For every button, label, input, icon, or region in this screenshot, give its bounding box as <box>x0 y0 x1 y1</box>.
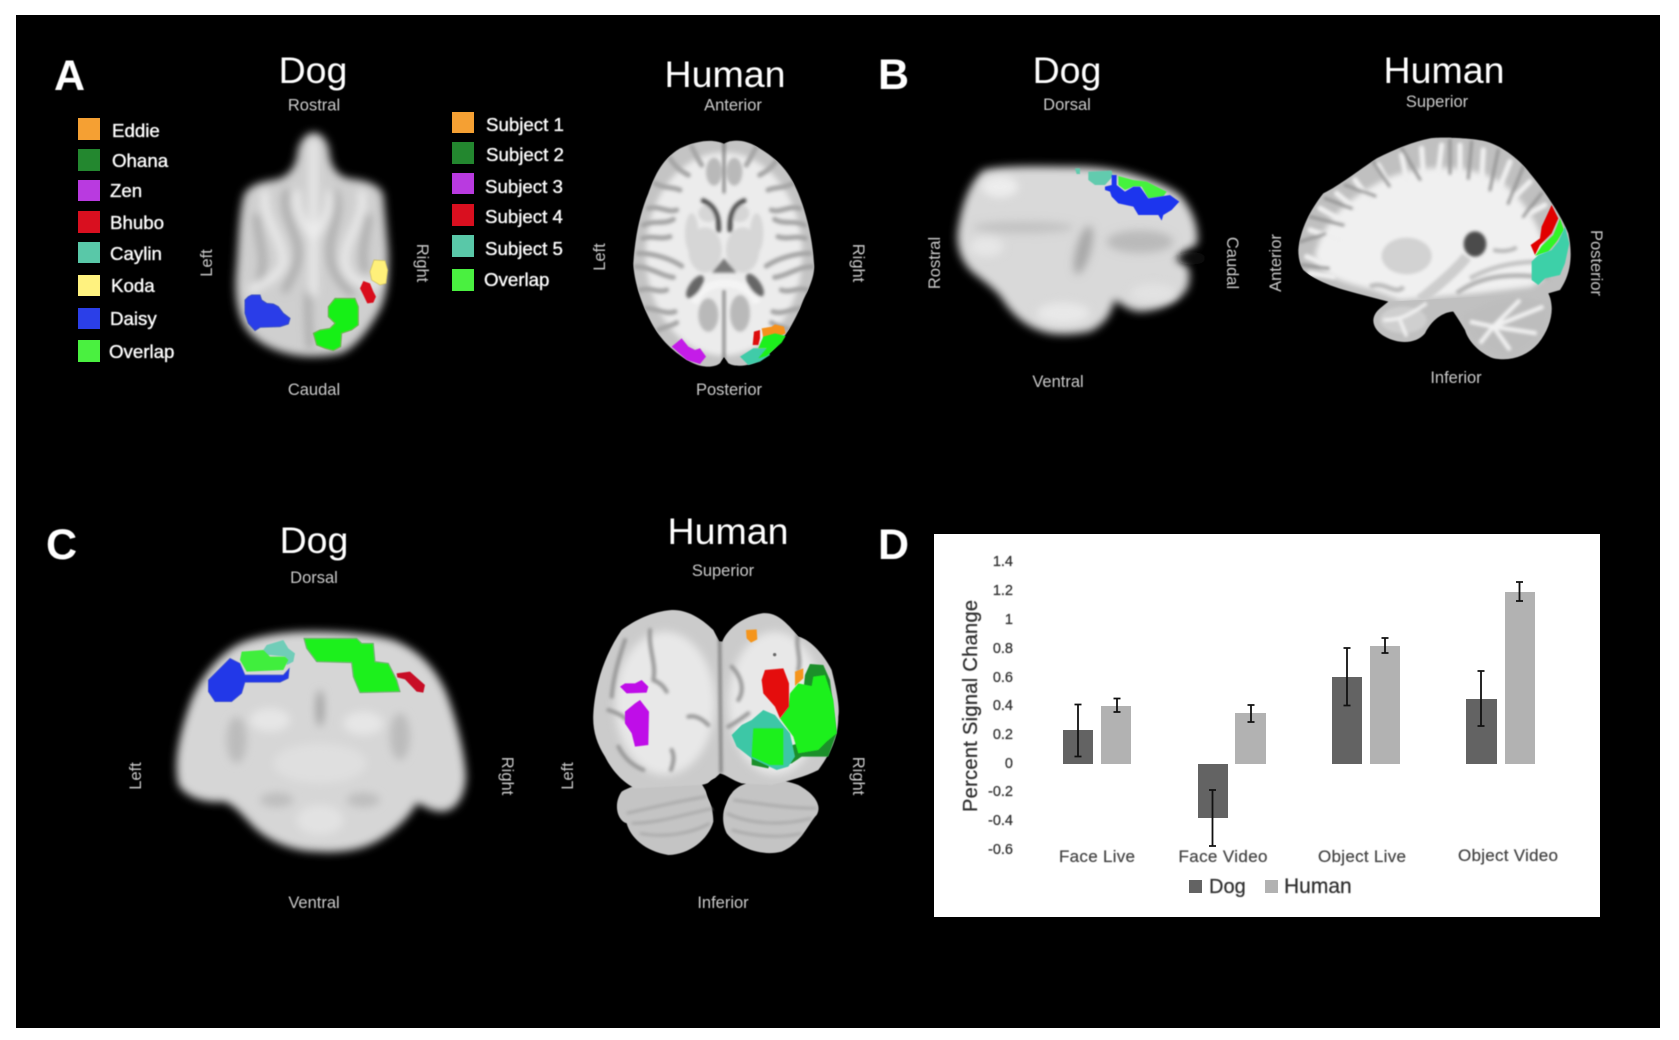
brain: human coronal <box>593 610 839 855</box>
orientation labels: Rostral <box>926 237 944 289</box>
y axis ticks: 1.2 <box>993 583 1013 599</box>
legend: dogs: Daisy <box>110 308 157 329</box>
heading: Dog: Dog <box>279 49 347 91</box>
panel B <box>878 49 1605 391</box>
heading: Human: Human <box>668 510 788 552</box>
orientation labels: Left <box>591 243 609 271</box>
brain: dog coronal <box>176 632 466 852</box>
legend: dogs: Caylin <box>110 243 162 264</box>
legend: human subjects: Subject 2 <box>486 144 564 165</box>
region: Daisy <box>208 658 289 702</box>
region: overlap right <box>304 638 400 693</box>
y axis ticks <box>988 554 1013 858</box>
orientation labels <box>198 96 867 399</box>
region: subject 1 <box>746 629 803 686</box>
region: subject 4 <box>1531 205 1558 255</box>
y axis ticks: 1 <box>1005 612 1013 628</box>
chart legend <box>1189 875 1352 898</box>
legend: dogs: Eddie <box>112 120 160 141</box>
orientation labels: Posterior <box>1587 230 1605 297</box>
orientation labels: Superior <box>692 562 755 580</box>
orientation labels: Left <box>559 762 577 790</box>
brain: dog axial <box>236 133 388 357</box>
panel A <box>54 49 867 399</box>
orientation labels: Caudal <box>288 381 340 399</box>
panel letter A: A <box>54 52 85 100</box>
legend: human subjects <box>452 112 564 291</box>
region: overlap <box>1535 218 1564 256</box>
bars: Face Video <box>1198 713 1266 818</box>
legend: human subjects: Subject 3 <box>485 176 563 197</box>
orientation labels: Dorsal <box>290 569 338 587</box>
orientation labels: Rostral <box>288 96 340 114</box>
chart background <box>934 534 1600 917</box>
legend: human subjects: Subject 5 <box>485 238 563 259</box>
orientation labels: Ventral <box>1032 373 1084 391</box>
y axis ticks: -0.2 <box>988 784 1013 800</box>
region: overlap left <box>240 650 288 672</box>
bar chart <box>1063 582 1535 846</box>
legend: dogs: Bhubo <box>110 212 164 233</box>
orientation labels: Anterior <box>1267 234 1285 292</box>
x axis labels <box>1059 846 1558 866</box>
y axis ticks: 1.4 <box>993 554 1013 570</box>
orientation labels: Dorsal <box>1043 96 1091 114</box>
region: Daisy <box>245 295 290 331</box>
region: Caylin <box>263 640 295 665</box>
chart legend: Human <box>1284 875 1352 898</box>
region: subject 4 <box>762 668 789 718</box>
error bars <box>1074 582 1523 846</box>
legend: dogs: Ohana <box>112 150 169 171</box>
orientation labels: Inferior <box>1430 369 1482 387</box>
heading: Dog: Dog <box>1033 49 1101 91</box>
y axis ticks: 0 <box>1005 756 1013 772</box>
heading: Human: Human <box>665 53 785 95</box>
panel letter B: B <box>878 51 909 99</box>
y axis ticks: 0.4 <box>993 698 1013 714</box>
orientation labels: Right <box>498 757 516 796</box>
region: Daisy <box>1105 175 1179 221</box>
chart legend: Dog <box>1209 876 1246 898</box>
orientation labels: Right <box>413 244 431 283</box>
region: Koda <box>370 260 388 285</box>
legend: human subjects: Subject 1 <box>486 114 564 135</box>
region: subject 2 <box>752 664 837 768</box>
orientation labels: Superior <box>1406 93 1469 111</box>
legend: dogs: Zen <box>110 180 142 201</box>
y axis ticks: 0.2 <box>993 727 1013 743</box>
legend: human subjects: Subject 4 <box>485 206 563 227</box>
region: overlap <box>313 298 358 351</box>
region: subject 5 <box>740 348 770 365</box>
region: subject 5 <box>732 710 795 770</box>
brain: human sagittal <box>1298 138 1571 359</box>
orientation labels: Left <box>127 762 145 790</box>
heading: Human: Human <box>1384 49 1504 91</box>
region: Caylin <box>1075 168 1113 185</box>
region: Bhubo <box>397 672 425 693</box>
panel letter D: D <box>878 521 909 569</box>
panel C <box>46 510 867 912</box>
bars: Face Live <box>1063 706 1131 764</box>
bars: Object Live <box>1332 646 1400 764</box>
x axis labels: Object Video <box>1458 846 1558 865</box>
brain: human axial <box>633 141 814 367</box>
panel letter C: C <box>46 521 77 569</box>
x axis labels: Face Video <box>1178 847 1268 866</box>
orientation labels: Left <box>198 249 216 277</box>
legend: dogs <box>78 118 174 362</box>
orientation labels <box>926 93 1605 391</box>
region: overlap <box>1118 176 1167 198</box>
orientation labels: Ventral <box>288 894 340 912</box>
legend: human subjects: Overlap <box>484 269 549 290</box>
y axis ticks: -0.6 <box>988 842 1013 858</box>
legend: dogs: Overlap <box>109 341 174 362</box>
region: subject 3 <box>620 680 649 747</box>
y axis ticks: -0.4 <box>988 813 1013 829</box>
region: subject 4 <box>753 330 760 345</box>
y axis title: Percent Signal Change <box>960 600 982 812</box>
y axis ticks: 0.8 <box>993 641 1013 657</box>
x axis labels: Face Live <box>1059 847 1135 866</box>
x axis labels: Object Live <box>1318 847 1406 866</box>
brain: dog sagittal <box>957 166 1207 334</box>
region: subject 1 <box>762 324 786 338</box>
region: subject 3 <box>672 338 706 364</box>
orientation labels: Right <box>849 244 867 283</box>
orientation labels: Anterior <box>704 96 762 114</box>
y axis ticks: 0.6 <box>993 670 1013 686</box>
region: overlap <box>752 675 837 765</box>
legend: dogs: Koda <box>111 275 155 296</box>
panel D <box>878 521 1600 917</box>
heading: Dog: Dog <box>280 519 348 561</box>
region: Bhubo <box>360 281 376 303</box>
region: subject 5 <box>1532 227 1569 285</box>
bars: Object Video <box>1466 592 1535 764</box>
orientation labels: Posterior <box>696 381 763 399</box>
orientation labels: Right <box>849 757 867 796</box>
region: overlap <box>758 333 786 358</box>
orientation labels: Inferior <box>697 894 749 912</box>
orientation labels: Caudal <box>1223 237 1241 289</box>
orientation labels <box>127 562 867 912</box>
